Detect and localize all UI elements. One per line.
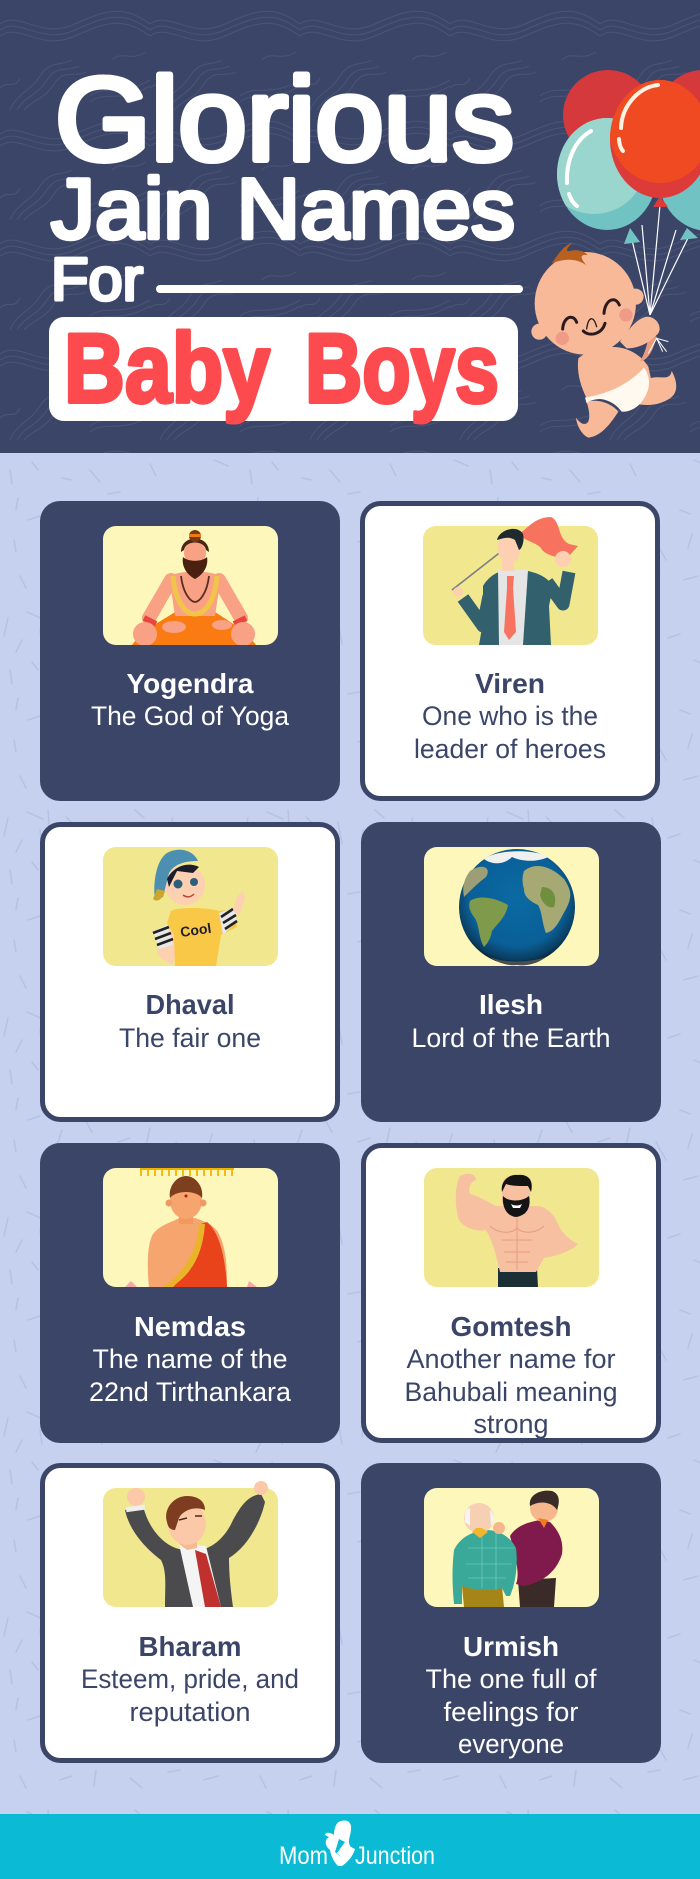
name: Bharam xyxy=(138,1631,242,1662)
meaning line 2: reputation xyxy=(130,1697,250,1727)
meaning line 3: everyone xyxy=(458,1729,564,1759)
logo: MomJunction: Mom xyxy=(279,1842,328,1870)
name: Ilesh xyxy=(479,989,543,1020)
body background xyxy=(0,453,700,1814)
meaning: The one full of xyxy=(426,1664,597,1694)
name: Dhaval xyxy=(146,989,234,1020)
name: Nemdas xyxy=(134,1311,246,1342)
meaning: The fair one xyxy=(119,1023,261,1053)
card: Viren xyxy=(362,504,658,798)
title badge: Baby Boys: Boys xyxy=(305,313,499,423)
image: muscular man xyxy=(424,1168,599,1287)
meaning: Lord of the Earth xyxy=(412,1023,610,1053)
name: Urmish xyxy=(463,1631,559,1662)
meaning: One who is the xyxy=(422,701,598,731)
card: Bharam xyxy=(42,1466,338,1760)
meaning line 3: strong xyxy=(474,1409,548,1439)
title badge: Baby Boys xyxy=(49,313,518,423)
image: grandfather and young man xyxy=(424,1488,599,1607)
card: Dhaval xyxy=(42,824,338,1120)
meaning: The name of the xyxy=(92,1344,288,1374)
card: Yogendra xyxy=(40,501,340,801)
icon: balloons xyxy=(542,70,700,315)
image: seated yogi xyxy=(103,526,278,646)
image: boy in cap xyxy=(103,847,278,966)
logo: MomJunction xyxy=(279,1820,435,1870)
card: Nemdas xyxy=(40,1143,340,1443)
title: For: For xyxy=(51,246,143,313)
name: Yogendra xyxy=(126,668,254,699)
title badge: Baby Boys: Baby xyxy=(64,313,270,423)
meaning line 2: leader of heroes xyxy=(414,734,606,764)
header banner xyxy=(0,0,700,453)
name: Viren xyxy=(475,668,545,699)
card: Gomtesh xyxy=(364,1146,658,1440)
title: Glorious: Glorious xyxy=(55,54,514,186)
image: Tirthankara xyxy=(103,1168,278,1287)
meaning: The God of Yoga xyxy=(91,701,290,731)
name: Gomtesh xyxy=(450,1311,572,1342)
meaning line 2: Bahubali meaning xyxy=(404,1377,618,1407)
card: Ilesh xyxy=(361,822,661,1122)
meaning line 2: feelings for xyxy=(444,1697,579,1727)
image: boy in cap: Cool xyxy=(179,920,212,940)
icon: baby xyxy=(531,242,676,438)
title underline rule xyxy=(156,285,523,293)
image: cheering man xyxy=(103,1481,278,1607)
image: leader with flag xyxy=(423,517,598,645)
meaning: Esteem, pride, and xyxy=(81,1664,299,1694)
meaning: Another name for xyxy=(406,1344,616,1374)
logo: MomJunction: Junction xyxy=(355,1842,435,1870)
meaning line 2: 22nd Tirthankara xyxy=(89,1377,292,1407)
card: Urmish xyxy=(361,1463,661,1763)
footer band xyxy=(0,1814,700,1879)
title: Jain Names: Jain Names xyxy=(51,162,515,257)
image: planet earth xyxy=(424,847,599,966)
